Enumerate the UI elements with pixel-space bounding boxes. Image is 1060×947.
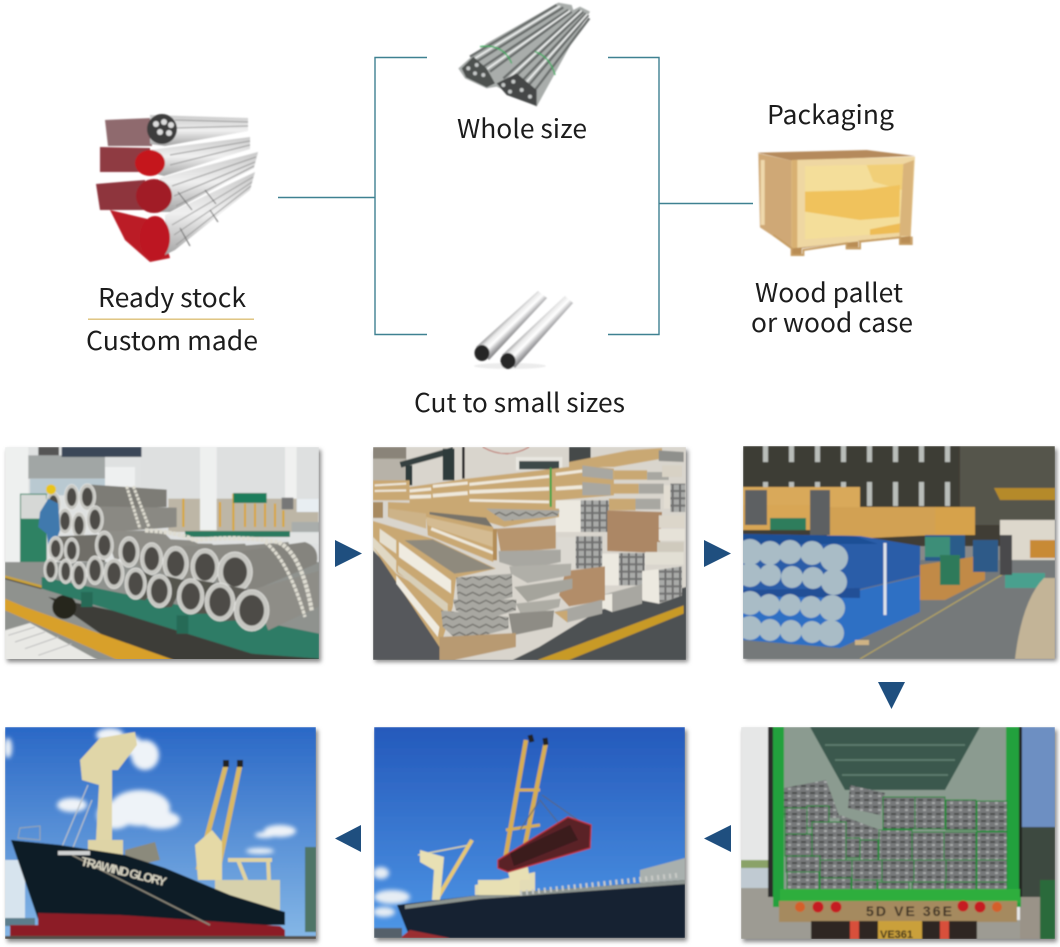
small marks [58,851,90,855]
cargo [784,780,840,818]
wheels & number plate [811,921,977,939]
photo 5: crane lifting cargo onto ship [374,727,685,938]
floor [373,547,443,660]
worker [38,499,60,557]
beige roll [1015,578,1055,659]
photo 3: blue wrapped bundles in warehouse [743,446,1055,659]
heading: cut to small sizes: Cut to small sizes [414,383,625,420]
image: whole size pipe bundle [458,2,591,108]
ground [770,920,1020,939]
blue upper [743,534,920,592]
lower row [44,558,57,581]
ship name: TRAWIND GLORY [79,854,169,889]
front wedge [373,521,496,607]
arrow: left 1 [704,825,731,852]
pallet blocks [855,640,869,645]
clouds [373,867,410,917]
right column [614,470,647,480]
cables [520,795,578,830]
label: ready stock: Ready stock [98,278,247,315]
photo shadows [7,449,1057,942]
heading: whole size: Whole size [457,109,587,146]
text: wood pallet or wood case [751,273,913,340]
green base [780,889,1020,903]
left light horizon [5,860,25,920]
arrow: left 2 [335,825,361,852]
hull black [11,840,285,925]
arrow: right 1 [335,540,362,567]
text: ready stock / custom made [86,278,258,358]
rear stacks [410,465,614,509]
far right tower [305,847,316,932]
small crane [418,845,470,855]
photo 4: loaded green container on truck [741,727,1055,941]
rope upper [127,486,149,529]
photo 4: loaded green container on truck: VE361 [880,929,913,941]
heading: packaging: Packaging [767,95,894,132]
big crane [505,740,546,860]
divider: gold line [88,318,254,320]
middle wedge [388,502,559,527]
arrow: right 2 [704,540,731,567]
hex ends [737,539,848,646]
arrow: down [878,682,905,709]
image: cut aluminium tubes [474,291,573,369]
image: ready stock pipe bundles [96,114,258,262]
photo 6: cargo ship Trawind Glory [5,727,316,939]
aft crane [228,858,272,905]
connector lines [278,58,753,334]
deck house [125,842,160,868]
container [773,727,1021,907]
image: wood crate [757,149,916,257]
hull red [10,913,285,938]
upper tubes [87,484,167,510]
middle row [56,534,105,562]
text: wood pallet or wood case: Wood pallet [755,273,903,310]
photo 2: boxed aluminium profiles [373,447,686,660]
far goods [925,535,965,561]
mast crane [80,732,137,840]
red frame cargo [498,817,591,872]
clouds [4,728,296,854]
label: custom made: Custom made [86,321,258,358]
rear plate [779,901,1017,922]
text: wood pallet or wood case: or wood case [751,303,913,340]
hull [397,880,685,938]
photo 1: thick aluminium tubes on a cart [5,447,319,659]
big twin crane [198,765,240,880]
rope [145,530,312,610]
superstructure [640,858,685,895]
big extrusions [556,500,609,532]
photo 4: loaded green container on truck: 5D VE 36E [866,903,952,919]
hull stripe [72,855,210,925]
